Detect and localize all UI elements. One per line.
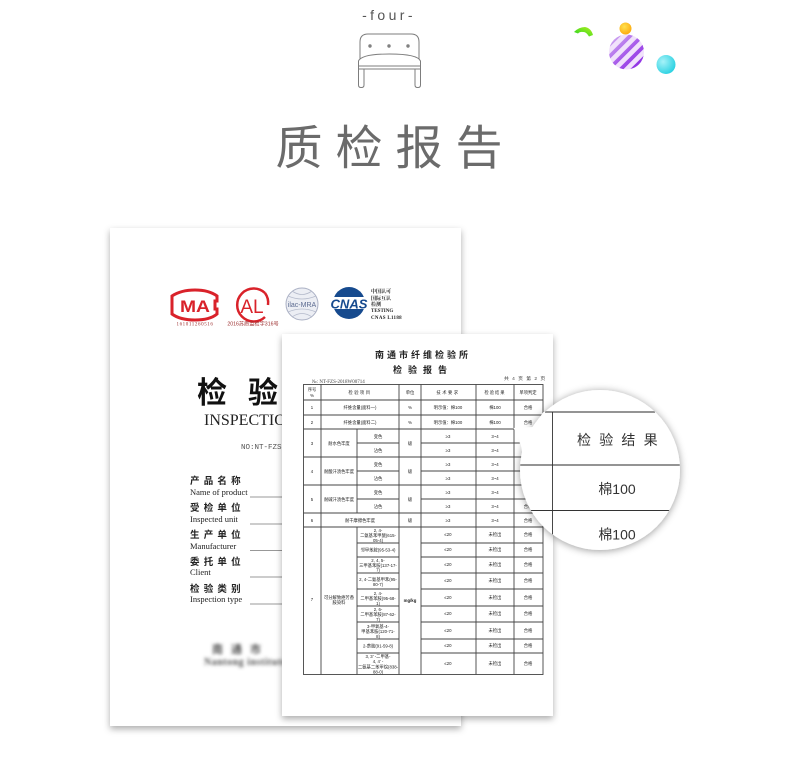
table text: 纤维含量(面料一) <box>344 404 377 411</box>
table text: 合格 <box>524 642 533 649</box>
icon: purple striped ball <box>609 34 644 70</box>
table text: ≥3 <box>446 434 451 439</box>
table text: 棉100 <box>489 419 501 426</box>
table text: 7) <box>376 617 380 622</box>
logo: CMA: 161011260516 <box>176 322 214 328</box>
logo: CAL: AL <box>240 297 264 318</box>
panel: report cover page <box>110 228 461 726</box>
table text: 4 <box>311 469 314 474</box>
table text: 合格 <box>524 419 533 426</box>
table text: 88-0) <box>373 670 384 674</box>
magnified text: 检验结果 <box>577 432 666 448</box>
logo: CNAS: CNAS <box>330 298 368 312</box>
cover heading: INSPECTIO <box>204 412 286 429</box>
table text: 未检出 <box>489 610 501 617</box>
table text: 合格 <box>524 561 533 568</box>
table text: 变色 <box>374 461 383 468</box>
logo: CAL <box>227 288 279 328</box>
table text: 3~4 <box>491 504 499 509</box>
table text: 级 <box>408 468 413 475</box>
table text: 棉100 <box>489 404 501 411</box>
table text: 沾色 <box>374 447 383 454</box>
table text: 检验项目 <box>348 389 372 396</box>
cover heading: 检验 <box>197 377 299 410</box>
table text: 合格 <box>524 517 533 524</box>
table text: 胺染料 <box>333 599 346 606</box>
table text: ≤20 <box>444 578 452 583</box>
table text: 合格 <box>524 577 533 584</box>
table text: 耐干摩擦色牢度 <box>345 517 376 524</box>
table text: 检验结果 <box>484 389 506 396</box>
icon: teal ball <box>656 55 676 74</box>
report table <box>304 384 543 674</box>
table text: 3~4 <box>491 462 499 467</box>
table text: 技术要求 <box>436 389 460 396</box>
icon: sofa <box>358 34 420 88</box>
table text: ≥3 <box>446 490 451 495</box>
table text: 邻甲苯胺(95-53-4) <box>361 546 396 554</box>
report heading: 共 4 页 第 2 页 <box>504 375 546 382</box>
table text: 合格 <box>524 503 533 510</box>
table text: ≥3 <box>446 462 451 467</box>
table text: 未检出 <box>489 627 501 634</box>
magnifier callout <box>514 390 680 560</box>
table text: 合格 <box>524 594 533 601</box>
table text: 合格 <box>524 475 533 482</box>
report heading <box>312 349 546 385</box>
table text: 2, 4-二氨基甲苯(95- <box>359 576 397 583</box>
table text: 1) <box>376 601 380 606</box>
table text: ≥3 <box>446 518 451 523</box>
table text: ≤20 <box>444 547 452 552</box>
table text: 耐水色牢度 <box>328 440 350 447</box>
table text: ≥3 <box>446 448 451 453</box>
cover form fields: 生产单位 <box>190 529 245 541</box>
table text: 6 <box>311 518 314 523</box>
table text: 2, 4, 5- <box>371 558 385 563</box>
table text: 合格 <box>524 546 533 553</box>
magnified text: 棉100 <box>598 481 636 497</box>
table text: 合格 <box>524 489 533 496</box>
table text: 2-萘胺(91-59-8) <box>363 642 394 650</box>
cover form fields: Inspection type <box>190 594 242 604</box>
table text: 二氨基苯甲醚(615- <box>360 532 396 539</box>
table text: 未检出 <box>489 577 501 584</box>
title: 质检报告 <box>276 122 516 174</box>
cover form fields: 委托单位 <box>190 556 245 568</box>
table text: ≤20 <box>444 595 452 600</box>
table text: 耐碱汗渍色牢度 <box>324 496 355 503</box>
table text: 明示值：棉100 <box>434 419 463 426</box>
cover heading <box>198 376 282 449</box>
table text: % <box>408 405 412 410</box>
table text: 2 <box>311 420 314 425</box>
table text: ≤20 <box>444 643 452 648</box>
table text: 未检出 <box>489 531 501 538</box>
cover form fields: Client <box>190 567 211 577</box>
table text: 级 <box>408 440 413 447</box>
table text: 二甲基苯胺(95-68- <box>360 595 396 602</box>
table text: ≤20 <box>444 562 452 567</box>
table text: 明示值：棉100 <box>434 404 463 411</box>
table text: 沾色 <box>374 503 383 510</box>
table text: ≥3 <box>446 476 451 481</box>
table text <box>308 386 537 674</box>
cover form fields: Name of product <box>190 487 248 497</box>
table text: 纤维含量(面料二) <box>344 419 377 426</box>
logo: CNAS: CNAS L1188 <box>371 316 402 321</box>
table text: 二甲基苯胺(87-62- <box>360 611 396 618</box>
table text: 合格 <box>524 627 533 634</box>
table text: 1 <box>311 405 314 410</box>
table text: % <box>310 393 314 398</box>
table text: 2, 4- <box>374 528 383 533</box>
cover form fields: 受检单位 <box>190 502 245 514</box>
logo: CMA: MA <box>180 297 210 316</box>
report heading: 南通市纤维检验所 <box>375 349 471 360</box>
logo: ilac-MRA <box>286 288 318 320</box>
table text: 80-7) <box>373 582 384 587</box>
table text: 序号 <box>308 386 316 393</box>
table text: 3~4 <box>491 448 499 453</box>
table text: 级 <box>408 496 413 503</box>
panel: inspection report page <box>282 334 553 716</box>
table text: 变色 <box>374 489 383 496</box>
table text: 单位 <box>406 389 415 396</box>
table text: 未检出 <box>489 642 501 649</box>
logo: CNAS <box>330 287 402 321</box>
table text: 未检出 <box>489 546 501 553</box>
magnified text <box>577 432 666 542</box>
table text: 合格 <box>524 433 533 440</box>
cover form fields: 检验类别 <box>190 583 245 595</box>
report heading: 检验报告 <box>393 364 453 375</box>
table text: 3, 3' -二甲基- <box>366 653 391 660</box>
table text: 3~4 <box>491 518 499 523</box>
table text: % <box>408 420 412 425</box>
table text: 合格 <box>524 404 533 411</box>
cover form fields: 产品名称 <box>190 475 245 487</box>
table text: 变色 <box>374 433 383 440</box>
table text: 3 <box>311 441 314 446</box>
logo: CMA <box>172 290 217 328</box>
table text: 未检出 <box>489 594 501 601</box>
logo: CNAS: 国际互认 <box>371 295 391 302</box>
blurred issuer <box>204 642 287 668</box>
logo: CAL: 2016苏质监检字316号 <box>227 320 279 328</box>
table text: ≥3 <box>446 504 451 509</box>
table text: 2, 6- <box>374 607 383 612</box>
table text: 合格 <box>524 447 533 454</box>
magnified text: 棉100 <box>598 526 636 542</box>
table text: 甲基苯胺(120-71- <box>361 628 395 635</box>
table text: 4, 4' - <box>373 659 384 664</box>
logo: CNAS: 检测 <box>371 301 381 308</box>
table text: 8) <box>376 634 380 639</box>
table text: 级 <box>408 517 413 524</box>
table text: 3~4 <box>491 476 499 481</box>
table text: 合格 <box>524 461 533 468</box>
table text: 沾色 <box>374 475 383 482</box>
table text: 05-4) <box>373 538 384 543</box>
table text: ≤20 <box>444 628 452 633</box>
table text: ≤20 <box>444 532 452 537</box>
table text: 单项判定 <box>519 389 537 396</box>
table text: 三甲基苯胺(137-17- <box>359 562 397 569</box>
cover form fields <box>190 475 283 604</box>
table text: 合格 <box>524 660 533 667</box>
table text: 3~4 <box>491 490 499 495</box>
table text: 合格 <box>524 531 533 538</box>
cover form fields: Manufacturer <box>190 541 236 551</box>
table text: ≤20 <box>444 611 452 616</box>
table text: 5 <box>311 497 314 502</box>
section label: four: -four- <box>362 7 416 23</box>
blurred issuer: 南通市 <box>212 642 269 656</box>
icon: orange ball <box>620 22 632 34</box>
decorative icons: spheres and arc <box>574 22 676 74</box>
table text: mg/kg <box>404 598 417 603</box>
table text: 未检出 <box>489 561 501 568</box>
table text: 可分解致癌芳香 <box>324 594 355 601</box>
table text: 合格 <box>524 610 533 617</box>
logo: CNAS: 中国认可 <box>371 288 391 295</box>
icon: green arc <box>574 27 593 36</box>
table text: 3-甲氧基-4- <box>367 623 390 630</box>
table text: 3~4 <box>491 434 499 439</box>
logo: CNAS: TESTING <box>371 309 393 314</box>
table grid <box>304 384 543 674</box>
table text: 未检出 <box>489 660 501 667</box>
report heading: №: NT-FZS-2018W00714 <box>312 379 365 385</box>
certification logos <box>172 287 402 328</box>
cover form fields: Inspected unit <box>190 514 239 524</box>
table text: ≤20 <box>444 661 452 666</box>
table text: 耐酸汗渍色牢度 <box>324 468 355 475</box>
table text: 二氨基二苯甲烷(838- <box>358 664 399 670</box>
cover heading: NO:NT-FZS- <box>241 444 286 452</box>
logo: ilac-MRA: ilac-MRA <box>288 302 317 309</box>
table text: 2, 4- <box>374 591 383 596</box>
table text: 7 <box>311 597 314 602</box>
blurred issuer: Nantong institute <box>204 657 287 668</box>
table text: 7) <box>376 568 380 572</box>
